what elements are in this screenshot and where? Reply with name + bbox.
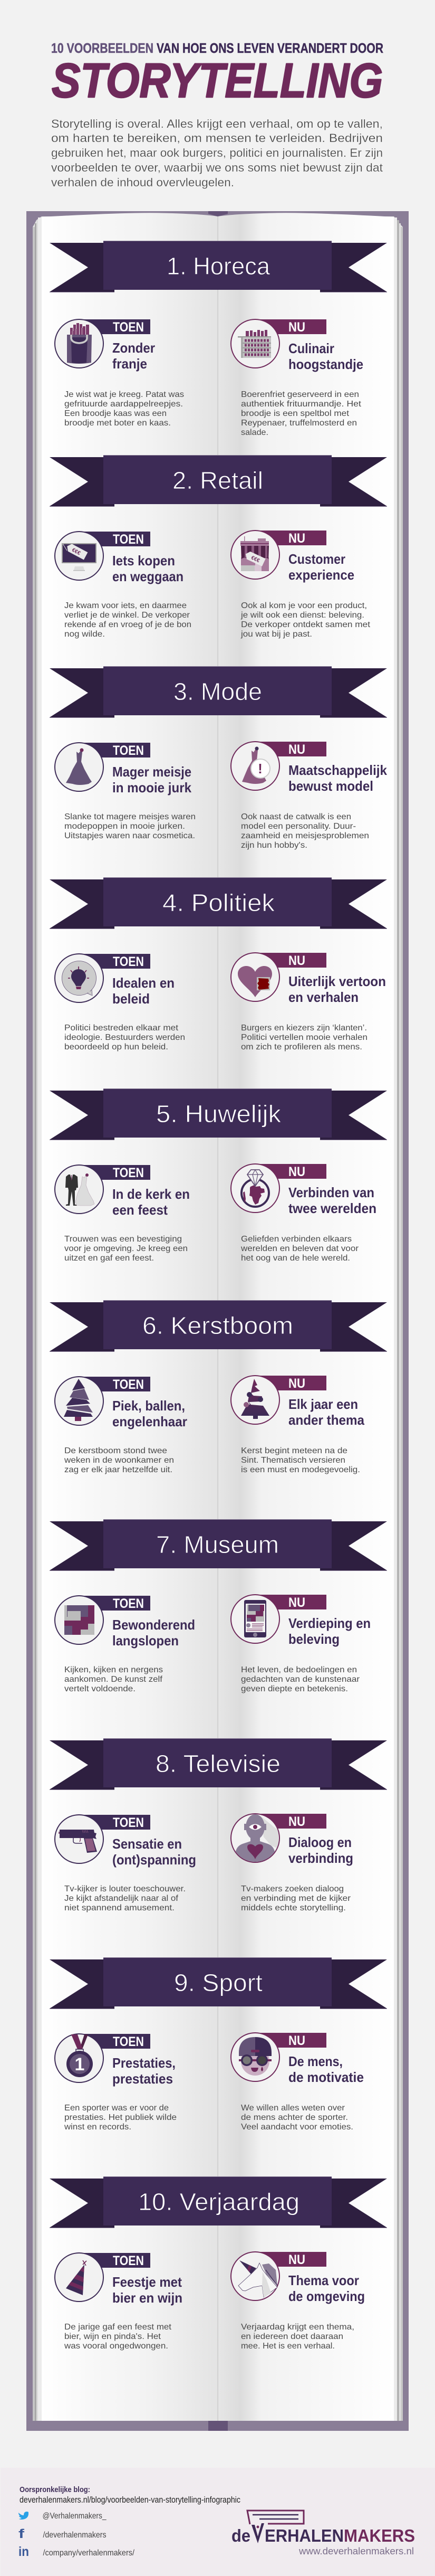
icon: winkelpand: €€€ [250, 555, 261, 564]
panel: toen televisie: (ont)spanning [112, 1852, 196, 1868]
section 3: Mode [50, 666, 387, 850]
panel: toen televisie: Tv-kijker is louter toeschouwer. [64, 1884, 186, 1893]
section 9: Sport [50, 1957, 387, 2132]
panel: nu mode: zaamheid en meisjesproblemen [241, 831, 369, 840]
banner: 9. Sport [50, 1957, 387, 2009]
panel: toen huwelijk: voor je omgeving. Je kreeg een [64, 1244, 188, 1253]
source text block [20, 2485, 240, 2505]
icon: persoon met oog en hart [235, 1814, 278, 1862]
icon: patat zak [67, 323, 92, 364]
panel: toen politiek: beleid [112, 991, 150, 1007]
panel: toen horeca: broodje met boter en kaas. [64, 419, 171, 428]
panel: toen politiek: Idealen en [112, 975, 175, 991]
icon: hart met pleister [238, 966, 272, 997]
panel: toen museum: aankomen. De kunst zelf [64, 1675, 163, 1684]
panel: nu verjaardag [231, 2252, 365, 2351]
panel: nu horeca: NU [288, 320, 305, 335]
logo: de verhalenmakers: MAKERS [344, 2526, 415, 2545]
source text block: deverhalenmakers.nl/blog/voorbeelden-van-storytelling-infographic [20, 2495, 240, 2505]
icon: jurk met uitroepteken [242, 746, 270, 784]
panel: nu museum: geven diepte en betekenis. [241, 1684, 348, 1693]
panel: nu televisie: Tv-makers zoeken dialoog [241, 1884, 344, 1893]
panel: toen museum [55, 1596, 195, 1693]
panel: nu horeca: hoogstandje [288, 356, 363, 372]
panel: toen kerstboom: Piek, ballen, [112, 1398, 185, 1414]
banner: 5. Huwelijk: 5. Huwelijk [156, 1100, 282, 1128]
banner: 10. Verjaardag: 10. Verjaardag [138, 2188, 299, 2215]
panel: nu politiek: om zich te profileren als mens. [241, 1043, 362, 1052]
panel: nu sport [231, 2033, 364, 2132]
panel: toen retail: en weggaan [112, 569, 183, 584]
panel: nu politiek: Burgers en kiezers zijn ‘klanten’. [241, 1024, 367, 1033]
panel: nu retail: Customer [288, 551, 345, 567]
panel: toen televisie: niet spannend amusement. [64, 1903, 175, 1912]
social: facebook handle: /deverhalenmakers [43, 2531, 107, 2540]
panel: toen retail: TOEN [113, 532, 144, 547]
intro text block [51, 117, 383, 189]
panel: nu retail: De verkoper ontdekt samen met [241, 620, 371, 629]
panel: nu kerstboom: Elk jaar een [288, 1396, 358, 1412]
panel: toen televisie: Je kijkt afstandelijk naar al of [64, 1894, 179, 1903]
panel: toen mode: TOEN [113, 743, 144, 758]
intro text block: gebruiken het, maar ook burgers, politici en journalisten. Er zijn [51, 146, 383, 159]
section 8: Televisie [50, 1738, 387, 1912]
icon: twitter [18, 2512, 28, 2520]
panel: toen sport: TOEN [113, 2034, 144, 2049]
icon: frituurmandje [238, 330, 271, 358]
panel: nu retail: jou wat bij je past. [240, 630, 312, 639]
panel: toen politiek: Politici bestreden elkaar met [64, 1024, 179, 1033]
intro text block: voorbeelden te over, waarbij we ons soms niet bewust zijn dat [51, 161, 383, 174]
panel: toen verjaardag [55, 2253, 182, 2351]
panel: nu kerstboom: NU [288, 1376, 305, 1391]
panel: toen huwelijk: TOEN [113, 1166, 144, 1180]
heading: 10 voorbeelden van hoe ons leven verandert door: VAN HOE ONS LEVEN VERANDERT DOOR [157, 40, 383, 56]
panel: nu kerstboom: Sint. Thematisch versieren [241, 1456, 345, 1465]
panel: toen kerstboom: engelenhaar [112, 1414, 187, 1429]
panel: nu museum: Verdieping en [288, 1615, 371, 1631]
panel: toen politiek: beoordeeld op hun beleid. [64, 1043, 168, 1052]
panel: toen politiek [55, 954, 185, 1052]
banner: 3. Mode [50, 666, 387, 718]
panel: toen retail: rekende af en vroeg of je de bon [64, 620, 191, 629]
panel: nu retail: NU [288, 531, 305, 546]
section 2: Retail [50, 455, 387, 639]
panel: nu verjaardag: de omgeving [288, 2288, 365, 2304]
banner: 1. Horeca: 1. Horeca [167, 252, 270, 280]
logo: de verhalenmakers: www.deverhalenmakers.nl [298, 2546, 414, 2556]
panel: toen retail: Je kwam voor iets, en daarmee [64, 601, 187, 610]
panel: toen horeca: Een broodje kaas was een [64, 409, 167, 418]
panel: nu televisie [231, 1814, 353, 1912]
section 1: Horeca [50, 241, 387, 437]
panel: nu televisie: verbinding [288, 1850, 353, 1866]
panel: open book background [26, 211, 409, 2431]
icon: monitor met prijskaartje [62, 543, 96, 571]
panel: toen verjaardag: bier en wijn [112, 2290, 182, 2306]
panel: nu mode: Maatschappelijk [288, 762, 387, 778]
panel: nu huwelijk: werelden en beleven dat voor [240, 1244, 359, 1253]
panel: toen kerstboom: weken in de woonkamer en [64, 1456, 174, 1465]
panel: toen mode: Mager meisje [112, 764, 191, 780]
panel: toen politiek: ideologie. Bestuurders werden [64, 1033, 185, 1042]
panel: toen horeca: Je wist wat je kreeg. Patat was [64, 390, 184, 399]
panel: nu verjaardag: Verjaardag krijgt een thema, [241, 2323, 354, 2332]
panel: toen verjaardag: TOEN [113, 2253, 144, 2268]
panel: toen retail [55, 532, 191, 639]
panel: toen museum: TOEN [113, 1596, 144, 1611]
footer panel [1, 2468, 435, 2576]
heading: 10 voorbeelden van hoe ons leven verandert door: 10 VOORBEELDEN [51, 40, 153, 56]
icon: gloeilamp in tekstballon [62, 961, 96, 996]
logo: de verhalenmakers: de [231, 2526, 250, 2545]
banner: 4. Politiek [50, 877, 387, 929]
panel: toen kerstboom: De kerstboom stond twee [64, 1446, 167, 1455]
banner: 9. Sport: 9. Sport [174, 1969, 263, 1996]
panel: nu mode: zijn hun hobby's. [241, 841, 307, 850]
panel: nu huwelijk [231, 1164, 376, 1263]
intro text block: Storytelling is overal. Alles krijgt een verhaal, om op te vallen, [51, 117, 383, 130]
panel: nu politiek [231, 953, 386, 1052]
panel: toen mode: modepoppen in mooie jurken. [64, 822, 185, 831]
panel: nu horeca: broodje is een speltbol met [241, 409, 350, 418]
panel: toen sport [55, 2034, 177, 2132]
icon: jurk met uitroepteken: ! [258, 761, 263, 776]
icon: jurk [66, 749, 92, 785]
panel: toen televisie: TOEN [113, 1815, 144, 1830]
panel: nu politiek: Politici vertellen mooie verhalen [241, 1033, 368, 1042]
panel: nu verjaardag: Thema voor [288, 2272, 359, 2288]
panel: nu politiek: NU [288, 953, 305, 968]
panel: toen horeca [55, 319, 184, 428]
panel: toen museum: Kijken, kijken en nergens [64, 1665, 163, 1674]
panel: nu huwelijk: het oog van de hele wereld. [241, 1254, 350, 1263]
panel: nu sport: de motivatie [288, 2069, 364, 2085]
panel: nu kerstboom: ander thema [288, 1412, 364, 1428]
panel: nu sport: Veel aandacht voor emoties. [241, 2123, 353, 2132]
icon: thema kerstboom [241, 1379, 269, 1419]
panel: nu museum: NU [288, 1595, 305, 1610]
panel: toen kerstboom: zag er elk jaar hetzelfde uit. [64, 1465, 172, 1474]
panel: nu televisie: NU [288, 1814, 305, 1829]
panel: nu verjaardag: en iedereen doet daaraan [241, 2332, 343, 2341]
panel: toen horeca: Zonder [112, 340, 155, 356]
panel: toen huwelijk: In de kerk en [112, 1186, 190, 1202]
panel: toen retail: Iets kopen [112, 553, 175, 569]
panel: nu huwelijk: NU [288, 1164, 305, 1179]
panel: nu huwelijk: Geliefden verbinden elkaars [241, 1235, 352, 1244]
panel: nu museum: beleving [288, 1631, 340, 1647]
panel: toen sport: prestaties [112, 2071, 173, 2087]
intro text block: verhalen de inhoud overvleugelen. [51, 176, 234, 189]
panel: toen retail: nog wilde. [64, 630, 105, 639]
panel: nu retail [231, 531, 371, 639]
panel: toen sport: Een sporter was er voor de [64, 2104, 169, 2113]
panel: toen museum: langslopen [112, 1633, 179, 1649]
panel: toen verjaardag: was vooral ongedwongen. [64, 2342, 168, 2351]
section 7: Museum [50, 1519, 387, 1693]
banner: 4. Politiek: 4. Politiek [162, 889, 275, 916]
icon: schilderijen collage [64, 1605, 94, 1635]
panel: nu retail: je wilt ook een dienst: beleving. [240, 611, 364, 620]
panel: nu huwelijk: Verbinden van [288, 1185, 374, 1200]
panel: nu museum [231, 1595, 371, 1693]
panel: nu museum: gedachten van de kunstenaar [241, 1675, 360, 1684]
panel: toen mode: Slanke tot magere meisjes waren [64, 812, 196, 821]
source text block: Oorspronkelijke blog: [20, 2485, 90, 2494]
panel: nu retail: experience [288, 567, 354, 583]
panel: nu politiek: en verhalen [288, 989, 359, 1005]
banner: 8. Televisie: 8. Televisie [156, 1750, 281, 1777]
heading: 10 voorbeelden van hoe ons leven verandert door [51, 40, 383, 56]
section 5: Huwelijk [50, 1088, 387, 1263]
panel: nu horeca: Culinair [288, 340, 334, 356]
panel: nu sport: De mens, [288, 2053, 343, 2069]
icon: feesthoed [66, 2260, 86, 2295]
panel: toen sport: prestaties. Het publiek wilde [64, 2113, 177, 2122]
banner: 6. Kerstboom: 6. Kerstboom [142, 1312, 293, 1339]
panel: nu retail: Ook al kom je voor een product, [241, 601, 367, 610]
icon: ring met wereldbol [241, 1170, 269, 1207]
panel: toen museum: Bewonderend [112, 1617, 195, 1633]
panel: nu mode: model een personality. Duur- [241, 822, 356, 831]
title: storytelling: STORYTELLING [52, 54, 383, 108]
icon: klassieke kerstboom [64, 1379, 93, 1421]
banner: 2. Retail [50, 455, 387, 507]
icon: medaille: 1 [75, 2054, 84, 2075]
panel: toen huwelijk [55, 1165, 190, 1263]
panel: nu museum: Het leven, de bedoelingen en [241, 1665, 357, 1674]
panel: nu horeca: salade. [241, 428, 268, 437]
panel: toen horeca: TOEN [113, 320, 144, 335]
panel: nu mode [231, 742, 387, 850]
panel: nu horeca: authentiek frituurmandje. Het [241, 400, 362, 409]
panel: toen televisie [55, 1815, 196, 1912]
section 10: Verjaardag [50, 2176, 387, 2351]
panel: toen mode: Uitstapjes waren naar cosmetica. [64, 831, 195, 840]
icon: linkedin: in [18, 2544, 29, 2559]
social: twitter handle: @Verhalenmakers_ [42, 2512, 107, 2521]
icon: monitor met prijskaartje: €€€ [71, 547, 82, 556]
panel: toen verjaardag: De jarige gaf een feest met [64, 2323, 172, 2332]
panel: nu verjaardag: mee. Het is een verhaal. [241, 2342, 335, 2351]
banner: 7. Museum [50, 1519, 387, 1571]
panel: toen mode [55, 743, 196, 840]
panel: nu mode: NU [288, 742, 305, 757]
panel: nu huwelijk: twee werelden [288, 1200, 376, 1216]
section 6: Kerstboom [50, 1300, 387, 1474]
icon: zwemmer met bril en traan [239, 2037, 272, 2076]
panel: nu televisie: middels echte storytelling. [241, 1903, 346, 1912]
icon: eenhoorn [238, 2260, 277, 2297]
banner: 8. Televisie [50, 1738, 387, 1790]
panel: toen huwelijk: Trouwen was een bevestiging [64, 1235, 182, 1244]
panel: nu horeca [231, 319, 363, 437]
panel: toen retail: verliet je de winkel. De verkoper [64, 611, 190, 620]
panel: nu televisie: en verbinding met de kijker [241, 1894, 351, 1903]
panel: toen sport: winst en records. [64, 2123, 131, 2132]
banner: 7. Museum: 7. Museum [156, 1531, 279, 1558]
panel: toen huwelijk: een feest [112, 1202, 168, 1218]
panel: nu sport: de mens achter de sporter. [241, 2113, 348, 2122]
panel: toen sport: Prestaties, [112, 2055, 176, 2071]
icon: winkelpand [240, 536, 269, 571]
banner: 6. Kerstboom [50, 1300, 387, 1352]
panel: nu horeca: Boerenfriet geserveerd in een [241, 390, 359, 399]
panel: nu verjaardag: NU [288, 2252, 305, 2267]
social: linkedin handle: /company/verhalenmakers/ [43, 2549, 134, 2558]
panel: toen horeca: franje [112, 356, 147, 372]
panel: toen verjaardag: bier, wijn en pinda's. Het [64, 2332, 161, 2341]
logo: de verhalenmakers [231, 2511, 415, 2556]
panel: nu mode: Ook naast de catwalk is een [241, 812, 351, 821]
panel: nu kerstboom: is een must en modegevoelig. [241, 1465, 360, 1474]
panel: toen televisie: Sensatie en [112, 1836, 182, 1852]
panel: nu politiek: Uiterlijk vertoon [288, 973, 386, 989]
logo: de verhalenmakers: ERHALEN [265, 2526, 344, 2545]
icon: bruidspaar [65, 1173, 94, 1206]
panel: toen mode: in mooie jurk [112, 780, 191, 795]
panel: nu televisie: Dialoog en [288, 1834, 352, 1850]
panel: nu mode: bewust model [288, 778, 373, 794]
banner: 5. Huwelijk [50, 1088, 387, 1140]
intro text block: om harten te bereiken, om mensen te verleiden. Bedrijven [51, 131, 383, 145]
panel: toen museum: vertelt voldoende. [64, 1684, 136, 1693]
banner: 3. Mode: 3. Mode [173, 678, 262, 705]
panel: nu kerstboom: Kerst begint meteen na de [241, 1446, 347, 1455]
panel: toen horeca: gefrituurde aardappelreepjes. [64, 400, 183, 409]
icon: medaille [66, 2034, 93, 2077]
panel: toen verjaardag: Feestje met [112, 2274, 182, 2290]
section 4: Politiek [50, 877, 387, 1052]
panel: toen politiek: TOEN [113, 954, 144, 969]
banner: 1. Horeca [50, 241, 387, 292]
panel: nu horeca: Reypenaer, truffelmosterd en [241, 419, 357, 428]
banner: 10. Verjaardag [50, 2176, 387, 2228]
panel: toen kerstboom [55, 1377, 187, 1474]
icon: smartphone [244, 1600, 266, 1637]
panel: toen huwelijk: uitzet en gaf een feest. [64, 1254, 154, 1263]
icon: facebook: f [18, 2527, 25, 2541]
panel: nu sport: We willen alles weten over [241, 2104, 345, 2113]
panel: nu kerstboom [231, 1376, 364, 1474]
icon: pistool [59, 1830, 97, 1853]
banner: 2. Retail: 2. Retail [172, 467, 263, 494]
panel: toen kerstboom: TOEN [113, 1377, 144, 1392]
panel: nu sport: NU [288, 2033, 305, 2048]
